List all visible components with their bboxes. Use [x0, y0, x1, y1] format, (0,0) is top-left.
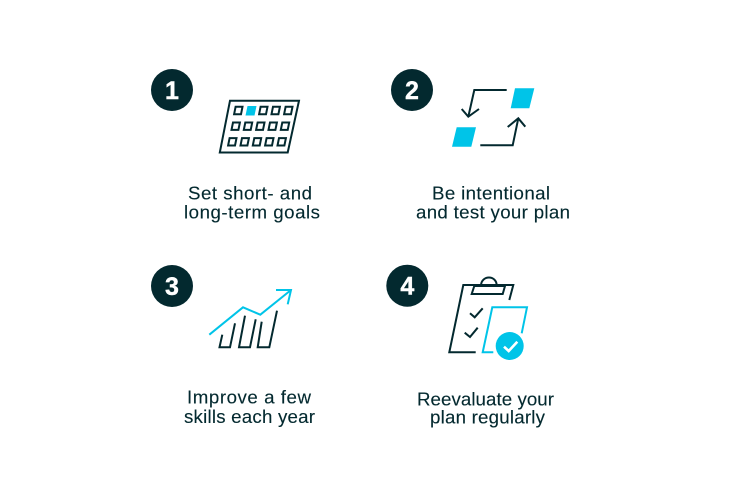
number badge 2: 2	[405, 77, 419, 105]
icon: clipboard checklist	[449, 278, 527, 360]
caption 3	[184, 386, 315, 427]
caption 4: Reevaluate your	[417, 388, 554, 410]
icon: calendar	[220, 101, 299, 152]
number badge 4	[386, 265, 428, 307]
step 2 panel	[391, 69, 570, 222]
caption 3: Improve a few	[187, 386, 312, 408]
caption 4: plan regularly	[430, 406, 546, 428]
number badge 3	[151, 265, 193, 307]
number badge 2	[391, 69, 433, 111]
step 3 panel	[151, 265, 315, 427]
number badge 1	[151, 69, 193, 111]
step 4 panel	[386, 265, 554, 428]
caption 2: Be intentional	[432, 182, 550, 204]
caption 1: Set short- and	[188, 182, 312, 204]
icon: growth chart	[209, 290, 291, 347]
number badge 4: 4	[400, 273, 414, 301]
caption 2	[416, 182, 570, 222]
number badge 1: 1	[165, 77, 179, 105]
caption 3: skills each year	[184, 406, 315, 427]
caption 2: and test your plan	[416, 202, 570, 222]
step 1 panel	[151, 69, 320, 222]
number badge 3: 3	[165, 273, 179, 301]
icon: cycle arrows	[452, 88, 534, 147]
caption 1	[184, 182, 320, 222]
caption 1: long-term goals	[184, 202, 320, 222]
caption 4	[417, 388, 554, 428]
